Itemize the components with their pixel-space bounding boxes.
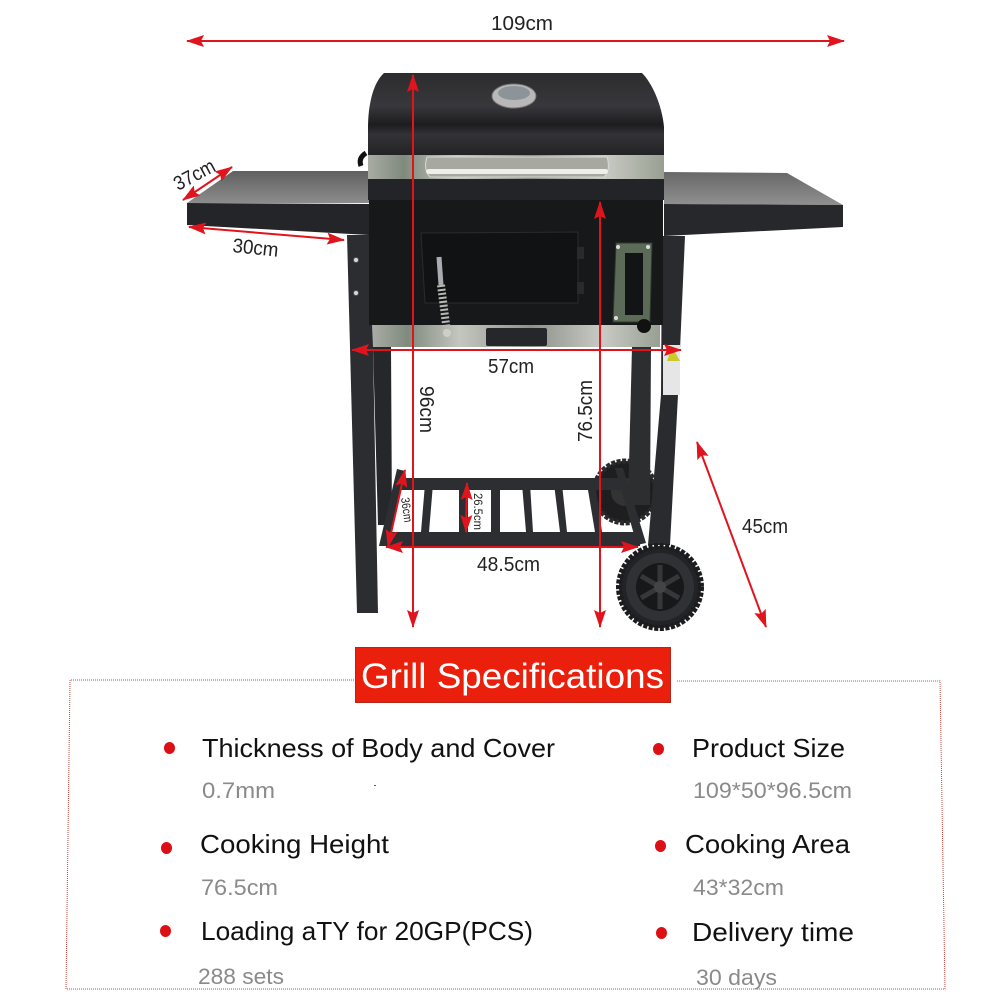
stray speck	[374, 785, 376, 786]
label: 109cm: 109cm	[491, 13, 553, 35]
label: 57cm: 57cm	[488, 356, 534, 378]
spec: cooking area	[655, 829, 851, 900]
front wheel	[619, 546, 701, 628]
heading: Grill Specifications	[356, 648, 670, 702]
spec: cooking height: Cooking Height	[200, 829, 390, 859]
arrow: total height	[412, 75, 414, 627]
firebox door	[421, 232, 584, 303]
spec: product size: Product Size	[692, 733, 845, 763]
spec: cooking area: Cooking Area	[685, 829, 851, 859]
arrow: shelf depth	[183, 167, 232, 200]
lower storage rack	[379, 468, 646, 546]
spec: thickness: Thickness of Body and Cover	[202, 733, 555, 763]
firebox body	[369, 200, 663, 325]
lid handle	[426, 157, 608, 177]
heading: Grill Specifications: Grill Specifications	[361, 657, 664, 696]
spec: loading quantity	[160, 916, 533, 989]
front left leg	[347, 235, 378, 613]
spec: cooking area: 43*32cm	[693, 875, 784, 900]
ash tray handle	[486, 328, 547, 346]
right side shelf	[664, 172, 843, 236]
arrow: body width	[352, 349, 681, 351]
lid steel band	[368, 155, 664, 179]
spec: product size	[653, 733, 852, 803]
label: 36cm: 36cm	[398, 496, 415, 523]
label: 96cm: 96cm	[415, 386, 437, 433]
arrow: slat length	[466, 483, 467, 532]
left side shelf	[187, 171, 369, 235]
left leg bolts	[354, 258, 358, 296]
spec: delivery time: 30 days	[696, 965, 777, 990]
lid lower lip	[368, 179, 664, 200]
label: 48.5cm: 48.5cm	[477, 554, 540, 576]
rear left leg	[373, 347, 392, 525]
front right leg	[648, 236, 685, 545]
label: 37cm: 37cm	[170, 155, 219, 195]
arrow: cart depth	[697, 442, 766, 627]
spec: thickness: 0.7mm	[202, 778, 275, 803]
spec: product size: 109*50*96.5cm	[693, 778, 852, 803]
label: 30cm: 30cm	[231, 235, 280, 262]
warning label	[663, 345, 680, 395]
spec: cooking height: 76.5cm	[201, 875, 278, 900]
air vent plate	[613, 243, 652, 333]
panel: grill specifications	[66, 648, 945, 990]
handle highlight	[426, 169, 608, 174]
arrow: total width	[187, 40, 844, 42]
label: 26.5cm: 26.5cm	[471, 493, 485, 530]
spec: delivery time	[656, 917, 854, 990]
side handle hook	[360, 153, 366, 166]
dimension arrows	[183, 41, 844, 627]
door spring handle	[439, 257, 451, 337]
spec: cooking height	[161, 829, 390, 900]
dotted panel border	[66, 680, 945, 989]
grill illustration	[187, 73, 843, 628]
spec: thickness	[164, 733, 555, 803]
label: 76.5cm: 76.5cm	[575, 380, 597, 442]
spec: loading quantity: 288 sets	[198, 964, 284, 989]
spec: loading quantity: Loading aTY for 20GP(PCS)	[201, 916, 533, 946]
arrow: cooking height	[599, 202, 601, 627]
label: 45cm: 45cm	[742, 516, 788, 538]
thermometer	[492, 84, 536, 108]
lower steel band	[373, 325, 660, 347]
lid	[368, 73, 664, 155]
rear right leg	[628, 347, 651, 505]
spec: delivery time: Delivery time	[692, 917, 854, 947]
arrow: shelf width	[189, 227, 344, 240]
rear wheel	[594, 461, 656, 523]
arrow: rack width	[386, 546, 638, 548]
dimension labels	[170, 13, 788, 576]
arrow: rack depth	[388, 470, 405, 547]
